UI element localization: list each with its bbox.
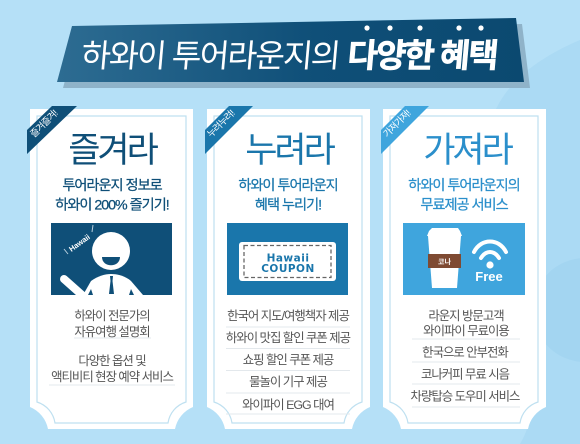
subheading: 무료제공 서비스 bbox=[420, 198, 509, 214]
list: 다양한 옵션 및 bbox=[78, 354, 146, 368]
list bbox=[226, 308, 351, 414]
list: 코나커피 무료 시음 bbox=[421, 368, 510, 382]
list: 자유여행 설명회 bbox=[74, 324, 150, 339]
subheading: 하와이 200% 즐기기! bbox=[55, 198, 169, 214]
list: 와이파이 EGG 대여 bbox=[242, 398, 334, 412]
heading: 누려라 bbox=[245, 131, 336, 170]
heading: 가져라 bbox=[423, 131, 514, 170]
list: 하와이 전문가의 bbox=[74, 309, 150, 323]
list: 와이파이 무료이용 bbox=[423, 324, 509, 338]
illustration: coupon: Hawaii bbox=[267, 252, 309, 264]
illustration: coupon: COUPON bbox=[261, 263, 315, 275]
list: 차량탑승 도우미 서비스 bbox=[411, 390, 520, 404]
heading: 즐겨라 bbox=[68, 131, 159, 170]
title banner bbox=[57, 18, 530, 88]
ribbon: 가져가져! bbox=[381, 108, 413, 140]
subheading: 투어라운지 정보로 bbox=[62, 178, 163, 194]
ribbon bbox=[205, 106, 253, 154]
list bbox=[411, 309, 520, 407]
subheading: 하와이 투어라운지의 bbox=[408, 178, 520, 194]
panel: 누려라 bbox=[205, 106, 370, 429]
title emphasis: 다양한 혜택 bbox=[346, 38, 498, 75]
list: 하와이 맛집 할인 쿠폰 제공 bbox=[226, 331, 351, 345]
list: 한국으로 안부전화 bbox=[422, 346, 508, 360]
panel: 가져라 bbox=[381, 106, 546, 429]
illustration: coffee and wifi bbox=[403, 223, 525, 295]
list: 액티비티 현장 예약 서비스 bbox=[51, 369, 173, 384]
icon: coffee cup: 코나 bbox=[438, 257, 451, 266]
title text: 하와이 투어라운지의 bbox=[80, 38, 340, 74]
subheading: 하와이 투어라운지 bbox=[238, 178, 338, 194]
ribbon bbox=[27, 106, 77, 154]
ribbon: 누려누려! bbox=[205, 108, 237, 140]
illustration: presenter bbox=[51, 223, 172, 295]
illustration: presenter: Hawaii bbox=[67, 232, 92, 254]
ribbon bbox=[381, 106, 429, 154]
list: 라운지 방문고객 bbox=[428, 309, 504, 323]
list: 물놀이 기구 제공 bbox=[249, 375, 327, 389]
subheading: 혜택 누리기! bbox=[255, 198, 321, 214]
list: 한국어 지도/여행책자 제공 bbox=[227, 308, 349, 323]
illustration: coupon bbox=[227, 223, 348, 295]
ribbon: 즐겨즐겨! bbox=[28, 108, 60, 140]
icon: wifi bbox=[474, 242, 506, 269]
list: 쇼핑 할인 쿠폰 제공 bbox=[243, 353, 334, 367]
list bbox=[49, 309, 175, 385]
panel: 즐겨라 bbox=[27, 106, 193, 429]
emphasis dots bbox=[364, 25, 484, 31]
label: Free: Free bbox=[475, 269, 503, 284]
